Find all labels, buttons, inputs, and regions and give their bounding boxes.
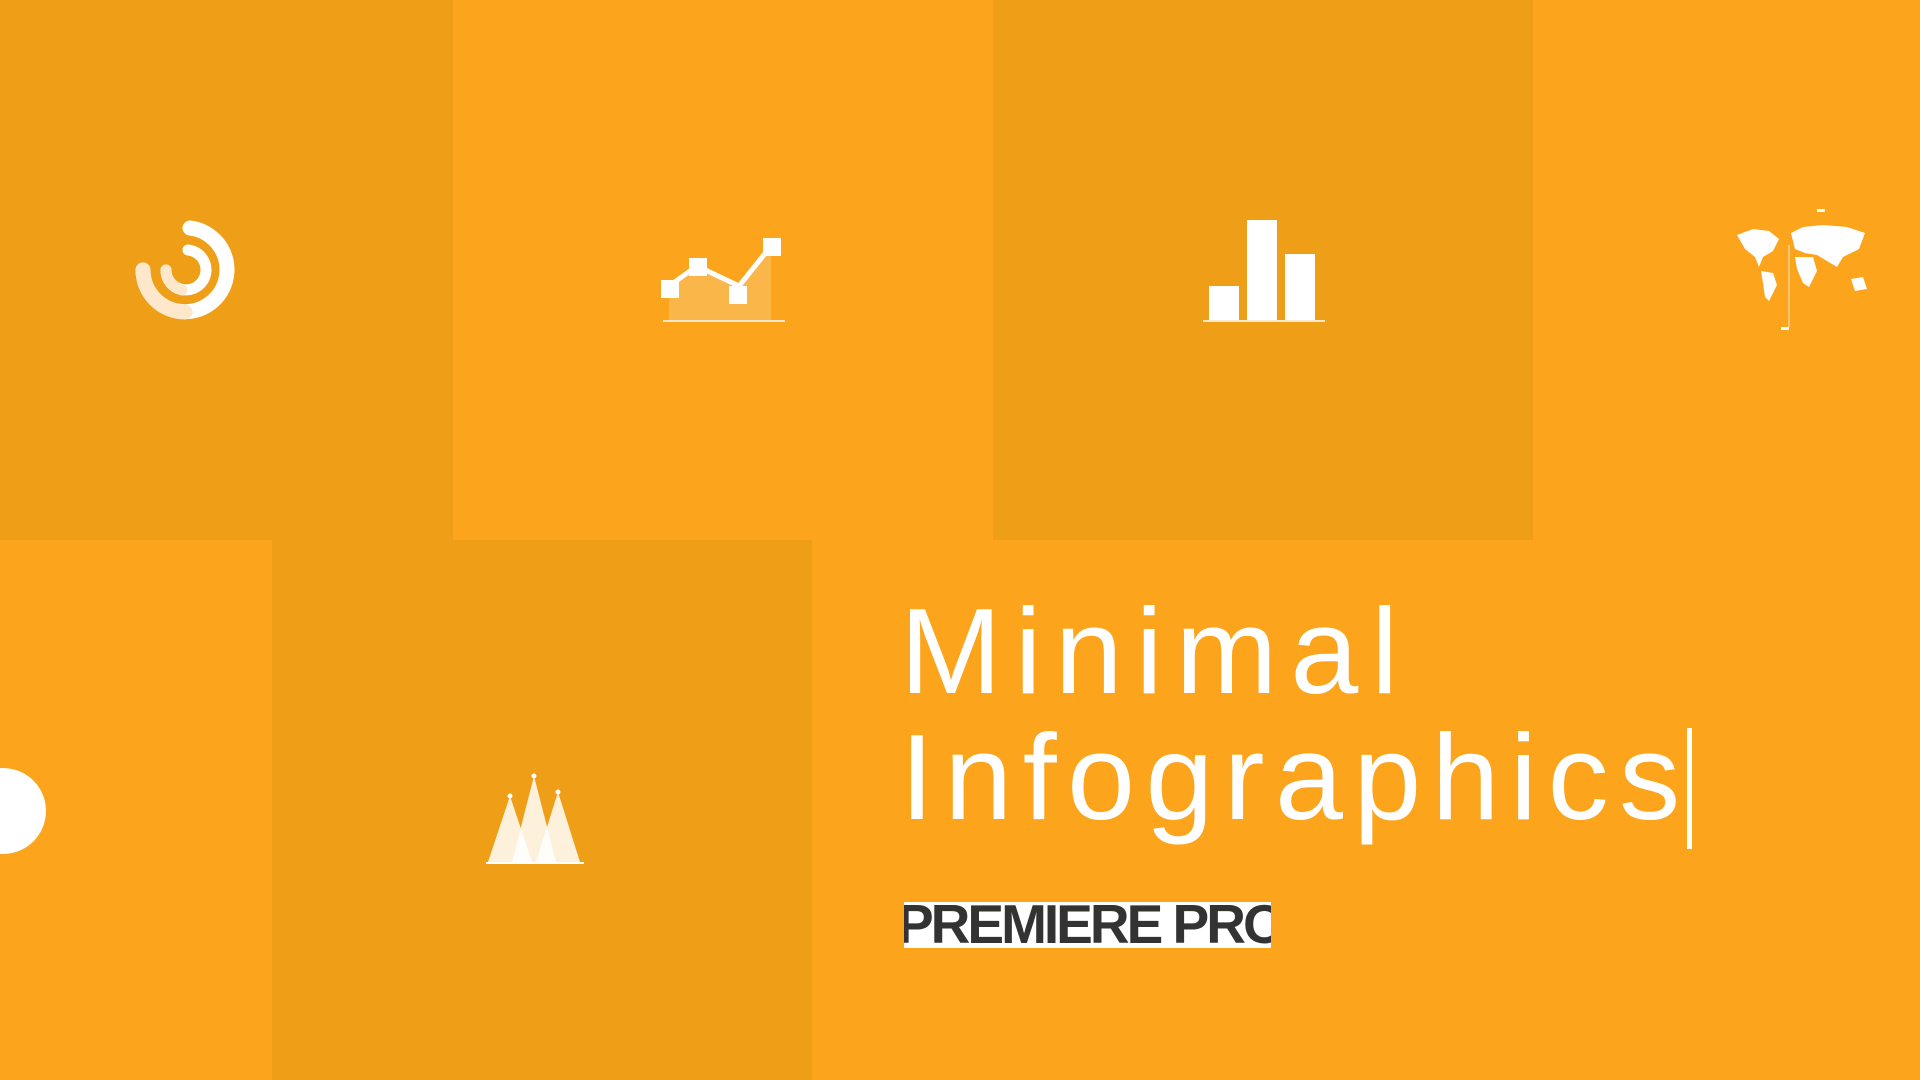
icon: partial circle bbox=[0, 768, 46, 854]
icon: world map bbox=[1737, 209, 1867, 330]
icon: bar chart bbox=[1203, 220, 1325, 322]
panel: top-right light bbox=[1533, 0, 1920, 540]
icon: donut spiral bbox=[136, 220, 234, 320]
panel: bottom-middle dark bbox=[272, 540, 812, 1080]
title: Minimal Infographics bbox=[900, 583, 1691, 845]
title: Minimal Infographics: Infographics bbox=[900, 709, 1691, 845]
panel: top-second light bbox=[453, 0, 993, 540]
text cursor bbox=[1687, 728, 1692, 849]
panel: top-third dark bbox=[993, 0, 1533, 540]
panel: top-left dark bbox=[0, 0, 453, 540]
icon: mountain chart bbox=[486, 774, 584, 864]
title: Minimal Infographics: Minimal bbox=[900, 583, 1411, 719]
panel: bottom-left light bbox=[0, 540, 272, 1080]
icon: line chart bbox=[661, 238, 785, 322]
